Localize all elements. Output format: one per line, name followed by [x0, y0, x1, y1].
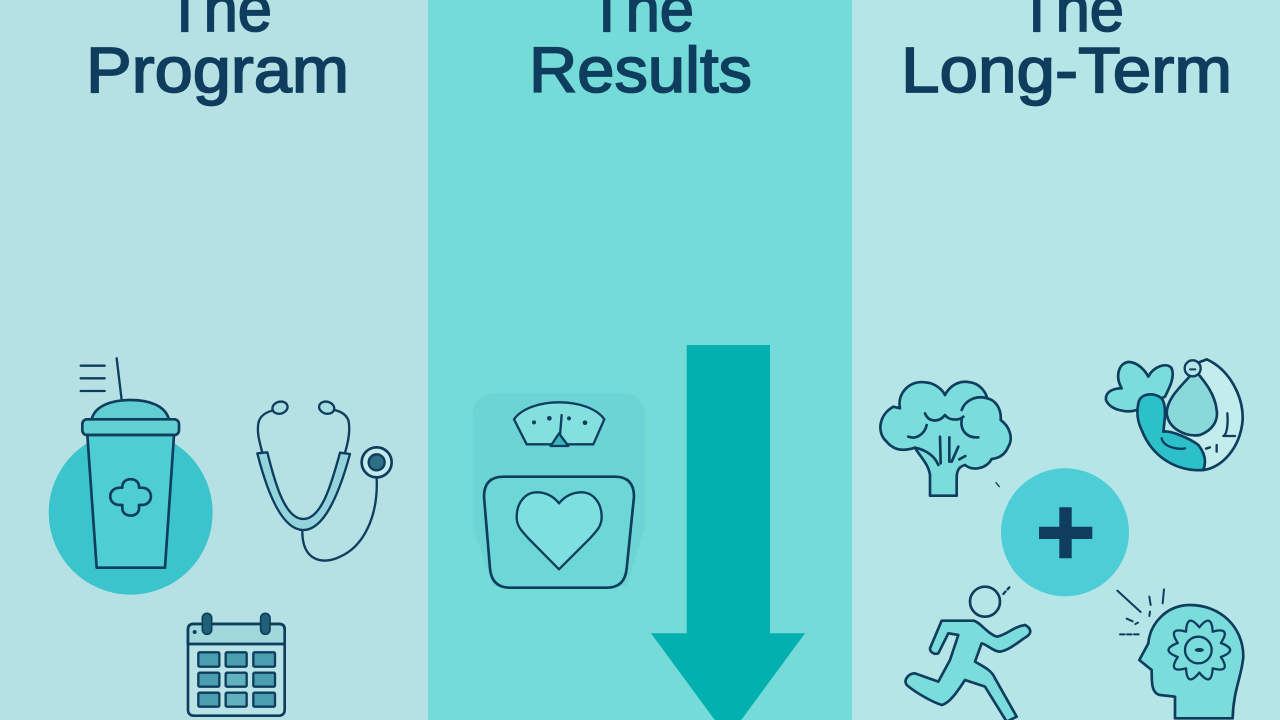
icon: calendar: [188, 613, 285, 716]
icon: water drop, leaf and arm: [1106, 359, 1243, 470]
arrow: downward reduction: [651, 345, 805, 720]
heading: the results: Results: [529, 34, 752, 106]
heading: the results: [529, 0, 752, 106]
icon: bathroom scale with heart: [473, 393, 645, 588]
icon: stethoscope: [257, 400, 392, 561]
heading: the program: [86, 0, 349, 106]
icon: head with gear: [1117, 589, 1243, 718]
icon: plus circle: [1001, 468, 1129, 596]
heading: the long-term: [901, 0, 1232, 106]
icon: broccoli: [880, 382, 1011, 496]
panel: the long-term: [852, 0, 1280, 720]
icon: running person: [906, 587, 1030, 720]
heading: the program: Program: [86, 34, 349, 106]
icon: meal replacement shake cup: [49, 358, 213, 595]
panel: the results: [428, 0, 852, 720]
panel: the program: [0, 0, 428, 720]
heading: the long-term: Long-Term: [901, 34, 1232, 106]
